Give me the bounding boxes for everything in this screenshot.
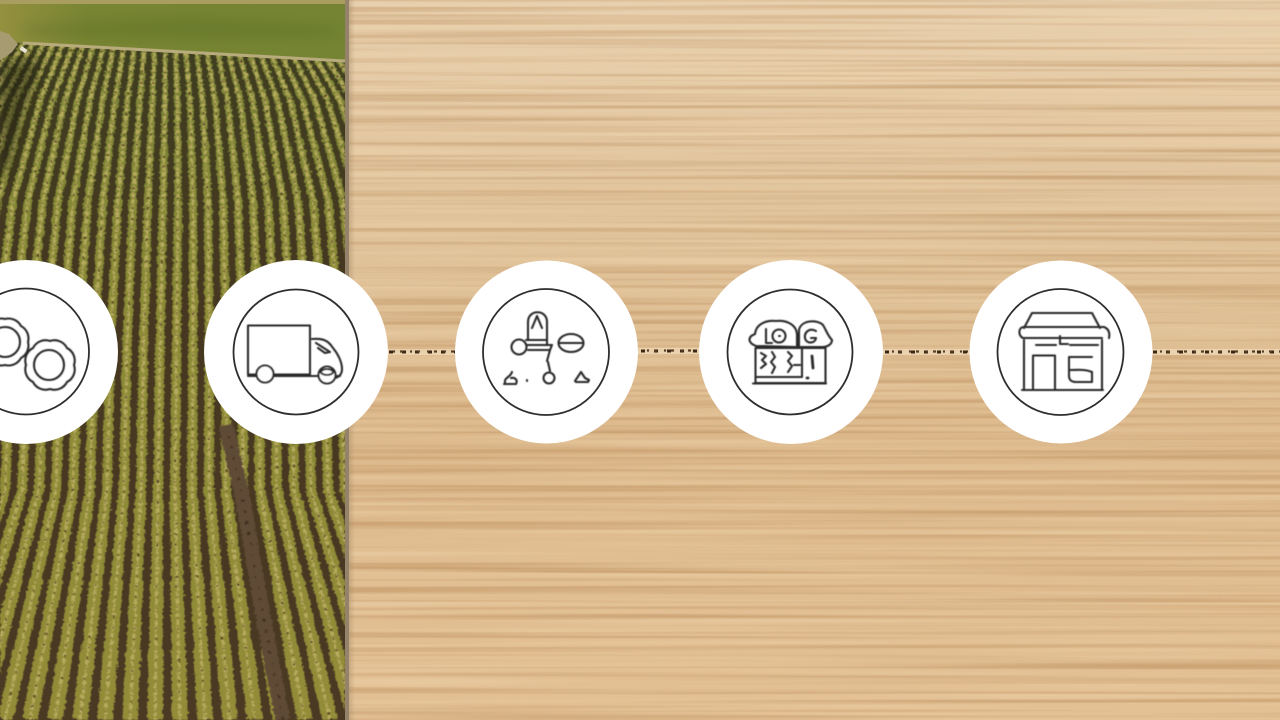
crop rows <box>0 43 345 720</box>
divider between photo and wood <box>345 0 349 720</box>
step 4: market stall circle <box>699 260 883 444</box>
icon: food processing tools <box>504 312 589 384</box>
dotted connector line <box>385 350 1280 352</box>
panel: wood texture background <box>349 0 1280 720</box>
step 5: store circle <box>970 260 1152 444</box>
icon: gears <box>0 319 75 390</box>
icon: market stall with goods <box>749 321 832 384</box>
distant green field <box>0 0 345 61</box>
step 3: processing circle <box>455 260 638 444</box>
icon: shop front <box>1019 313 1109 390</box>
panel: aerial farm field photo <box>0 0 345 720</box>
step 2: truck circle <box>204 260 388 444</box>
field shadow on the left <box>0 58 42 185</box>
step 1: gears circle <box>0 260 118 444</box>
icon: delivery truck <box>248 326 342 384</box>
farmstead at field corner <box>0 31 28 60</box>
